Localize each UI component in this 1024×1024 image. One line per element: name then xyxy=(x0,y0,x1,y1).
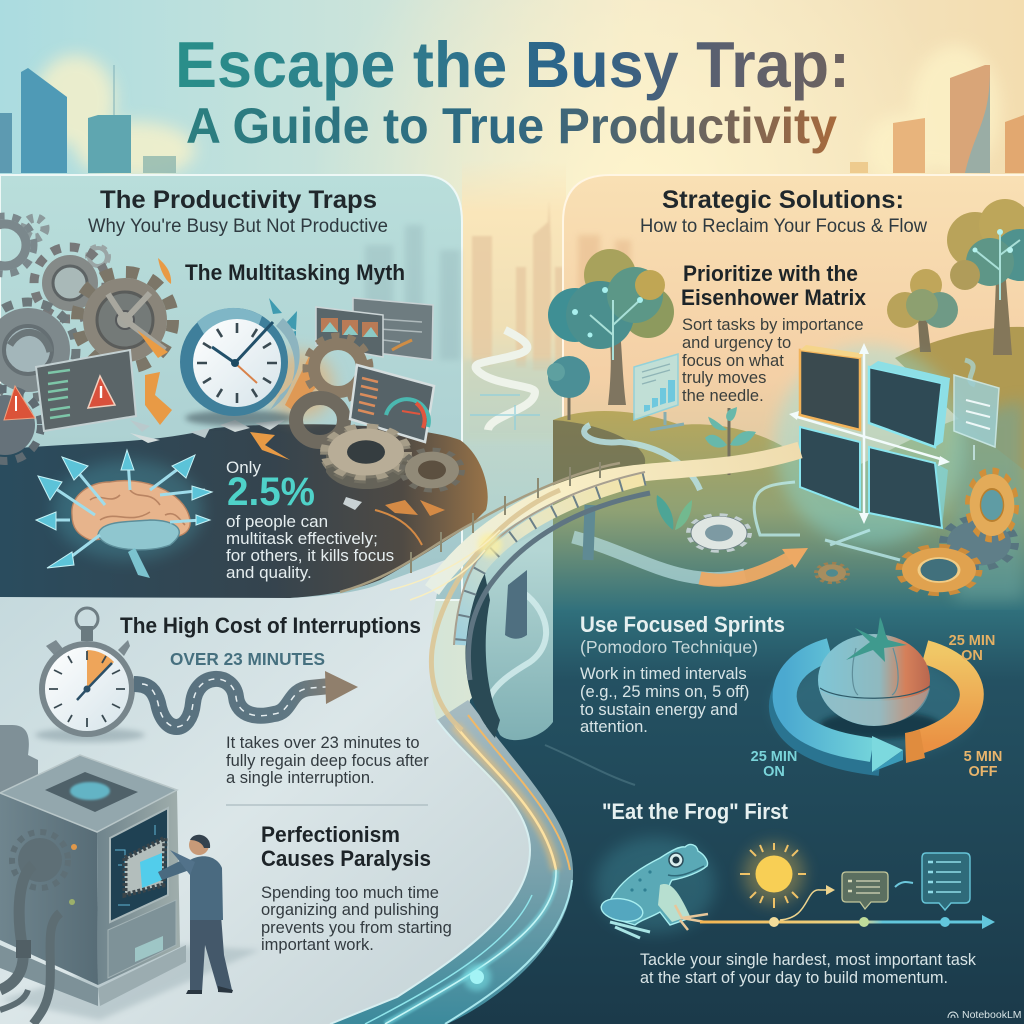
panel: lower left interruptions xyxy=(0,560,530,1024)
heading: perfectionism: Perfectionism xyxy=(261,822,400,847)
text: interruptions body: It takes over 23 minutes to xyxy=(226,734,420,752)
text: matrix body: and urgency to xyxy=(682,334,791,352)
labels: pomodoro: OFF xyxy=(968,764,998,780)
subheading: why busy: Why You're Busy But Not Productive xyxy=(88,215,388,237)
labels: pomodoro xyxy=(751,633,1002,780)
text: matrix body: truly moves xyxy=(682,369,766,387)
text: perfectionism body: organizing and pulishing xyxy=(261,901,439,919)
text: only: Only xyxy=(226,458,261,477)
icon: alert dashboard screen xyxy=(4,350,136,431)
icon: checklist bubble small xyxy=(842,872,888,909)
heading: cost of interruptions: The High Cost of Interruptions xyxy=(120,613,421,638)
text: multitask body: for others, it kills focus xyxy=(226,546,394,565)
title: A Guide to True Productivity xyxy=(186,98,837,154)
text: sprints body: attention. xyxy=(580,718,648,736)
text: matrix body: the needle. xyxy=(682,387,764,405)
icon: sapling xyxy=(657,407,756,530)
icon: sun xyxy=(740,843,806,908)
stat: 2.5 percent: 2.5% xyxy=(227,470,315,514)
text: multitask body: and quality. xyxy=(226,563,312,582)
heading: multitasking myth: The Multitasking Myth xyxy=(185,260,405,285)
text: matrix body: Sort tasks by importance xyxy=(682,316,864,334)
icon: orange cracks and rubble xyxy=(130,258,445,545)
lower ribbon xyxy=(330,700,635,1024)
text: matrix body: focus on what xyxy=(682,352,784,370)
subheading: pomodoro technique: (Pomodoro Technique) xyxy=(580,637,758,657)
icon: cracked gear behind gauge xyxy=(296,336,412,442)
text: perfectionism body: prevents you from starting xyxy=(261,919,452,937)
icon: timeline with arrow xyxy=(700,882,995,929)
heading: focused sprints: Use Focused Sprints xyxy=(580,612,785,637)
heading: eisenhower matrix: Eisenhower Matrix xyxy=(681,285,867,310)
panel: lower right dark background xyxy=(430,610,1024,1024)
heading: perfectionism: Causes Paralysis xyxy=(261,846,431,871)
labels: pomodoro: 5 MIN xyxy=(964,749,1002,765)
title: Escape the Busy Trap: xyxy=(175,28,850,101)
icon: broken clock xyxy=(180,298,300,426)
heading: eat the frog: "Eat the Frog" First xyxy=(602,799,789,824)
icon: machine with man xyxy=(0,725,260,1024)
text: frog body: Tackle your single hardest, most important task xyxy=(640,951,977,969)
dark ground with hill xyxy=(0,424,488,598)
panel: strategic solutions xyxy=(547,175,1024,640)
labels: pomodoro: 25 MIN xyxy=(949,633,995,649)
icon: checklist panel xyxy=(954,375,999,460)
text: sprints body: to sustain energy and xyxy=(580,701,738,719)
icon: gauge screen xyxy=(350,365,434,442)
text: sprints body: (e.g., 25 mins on, 5 off) xyxy=(580,683,749,701)
icon: frog xyxy=(595,837,715,938)
heading: eisenhower matrix: Prioritize with the xyxy=(683,261,858,286)
icon: path and orange arrow xyxy=(573,482,900,580)
labels: pomodoro: ON xyxy=(763,764,785,780)
icon: pomodoro tomato timer xyxy=(774,617,974,772)
title xyxy=(175,28,850,154)
icon: small tree xyxy=(547,356,590,420)
icon: large tree xyxy=(548,249,674,405)
icon: right trees xyxy=(887,199,1024,355)
text: sprints body: Work in timed intervals xyxy=(580,665,747,683)
heading: strategic solutions: Strategic Solutions: xyxy=(662,186,904,214)
icon: flat gears on hill xyxy=(326,427,460,489)
icon: winding road arrow xyxy=(134,671,358,727)
text: perfectionism body: important work. xyxy=(261,936,374,954)
label: over 23 minutes: OVER 23 MINUTES xyxy=(170,649,325,669)
text: multitask body: multitask effectively; xyxy=(226,529,378,548)
icon: gears on ground xyxy=(691,473,1015,593)
icon: stopwatch xyxy=(35,608,145,742)
pale column under bridge xyxy=(466,525,553,740)
center gap cityscape with winding road xyxy=(462,160,566,600)
logo: notebooklm: NotebookLM xyxy=(962,1009,1022,1021)
icon: checklist bubble large xyxy=(922,853,970,910)
chart: eisenhower matrix xyxy=(789,343,950,528)
heading: productivity traps: The Productivity Traps xyxy=(100,186,377,214)
icon: broken gears cluster xyxy=(0,216,173,461)
icon: winding path on hill xyxy=(584,360,975,490)
icon: brain with arrows xyxy=(36,450,212,578)
text: perfectionism body: Spending too much time xyxy=(261,884,439,902)
labels: pomodoro: 25 MIN xyxy=(751,749,797,765)
text: interruptions body: a single interruption. xyxy=(226,769,375,787)
icon: chart screens xyxy=(316,298,433,360)
background skyline xyxy=(0,45,1024,185)
text: frog body: at the start of your day to build momentum. xyxy=(640,969,948,987)
panel: productivity traps xyxy=(0,175,488,600)
text: multitask body: of people can xyxy=(226,512,328,531)
subheading: reclaim focus: How to Reclaim Your Focus & Flow xyxy=(640,215,928,237)
hills xyxy=(553,400,1024,640)
bridge xyxy=(340,450,800,730)
icon: matrix glow xyxy=(775,345,965,545)
text: interruptions body: fully regain deep focus after xyxy=(226,752,429,770)
labels: pomodoro: ON xyxy=(961,648,983,664)
icon: chart screen xyxy=(634,354,684,430)
